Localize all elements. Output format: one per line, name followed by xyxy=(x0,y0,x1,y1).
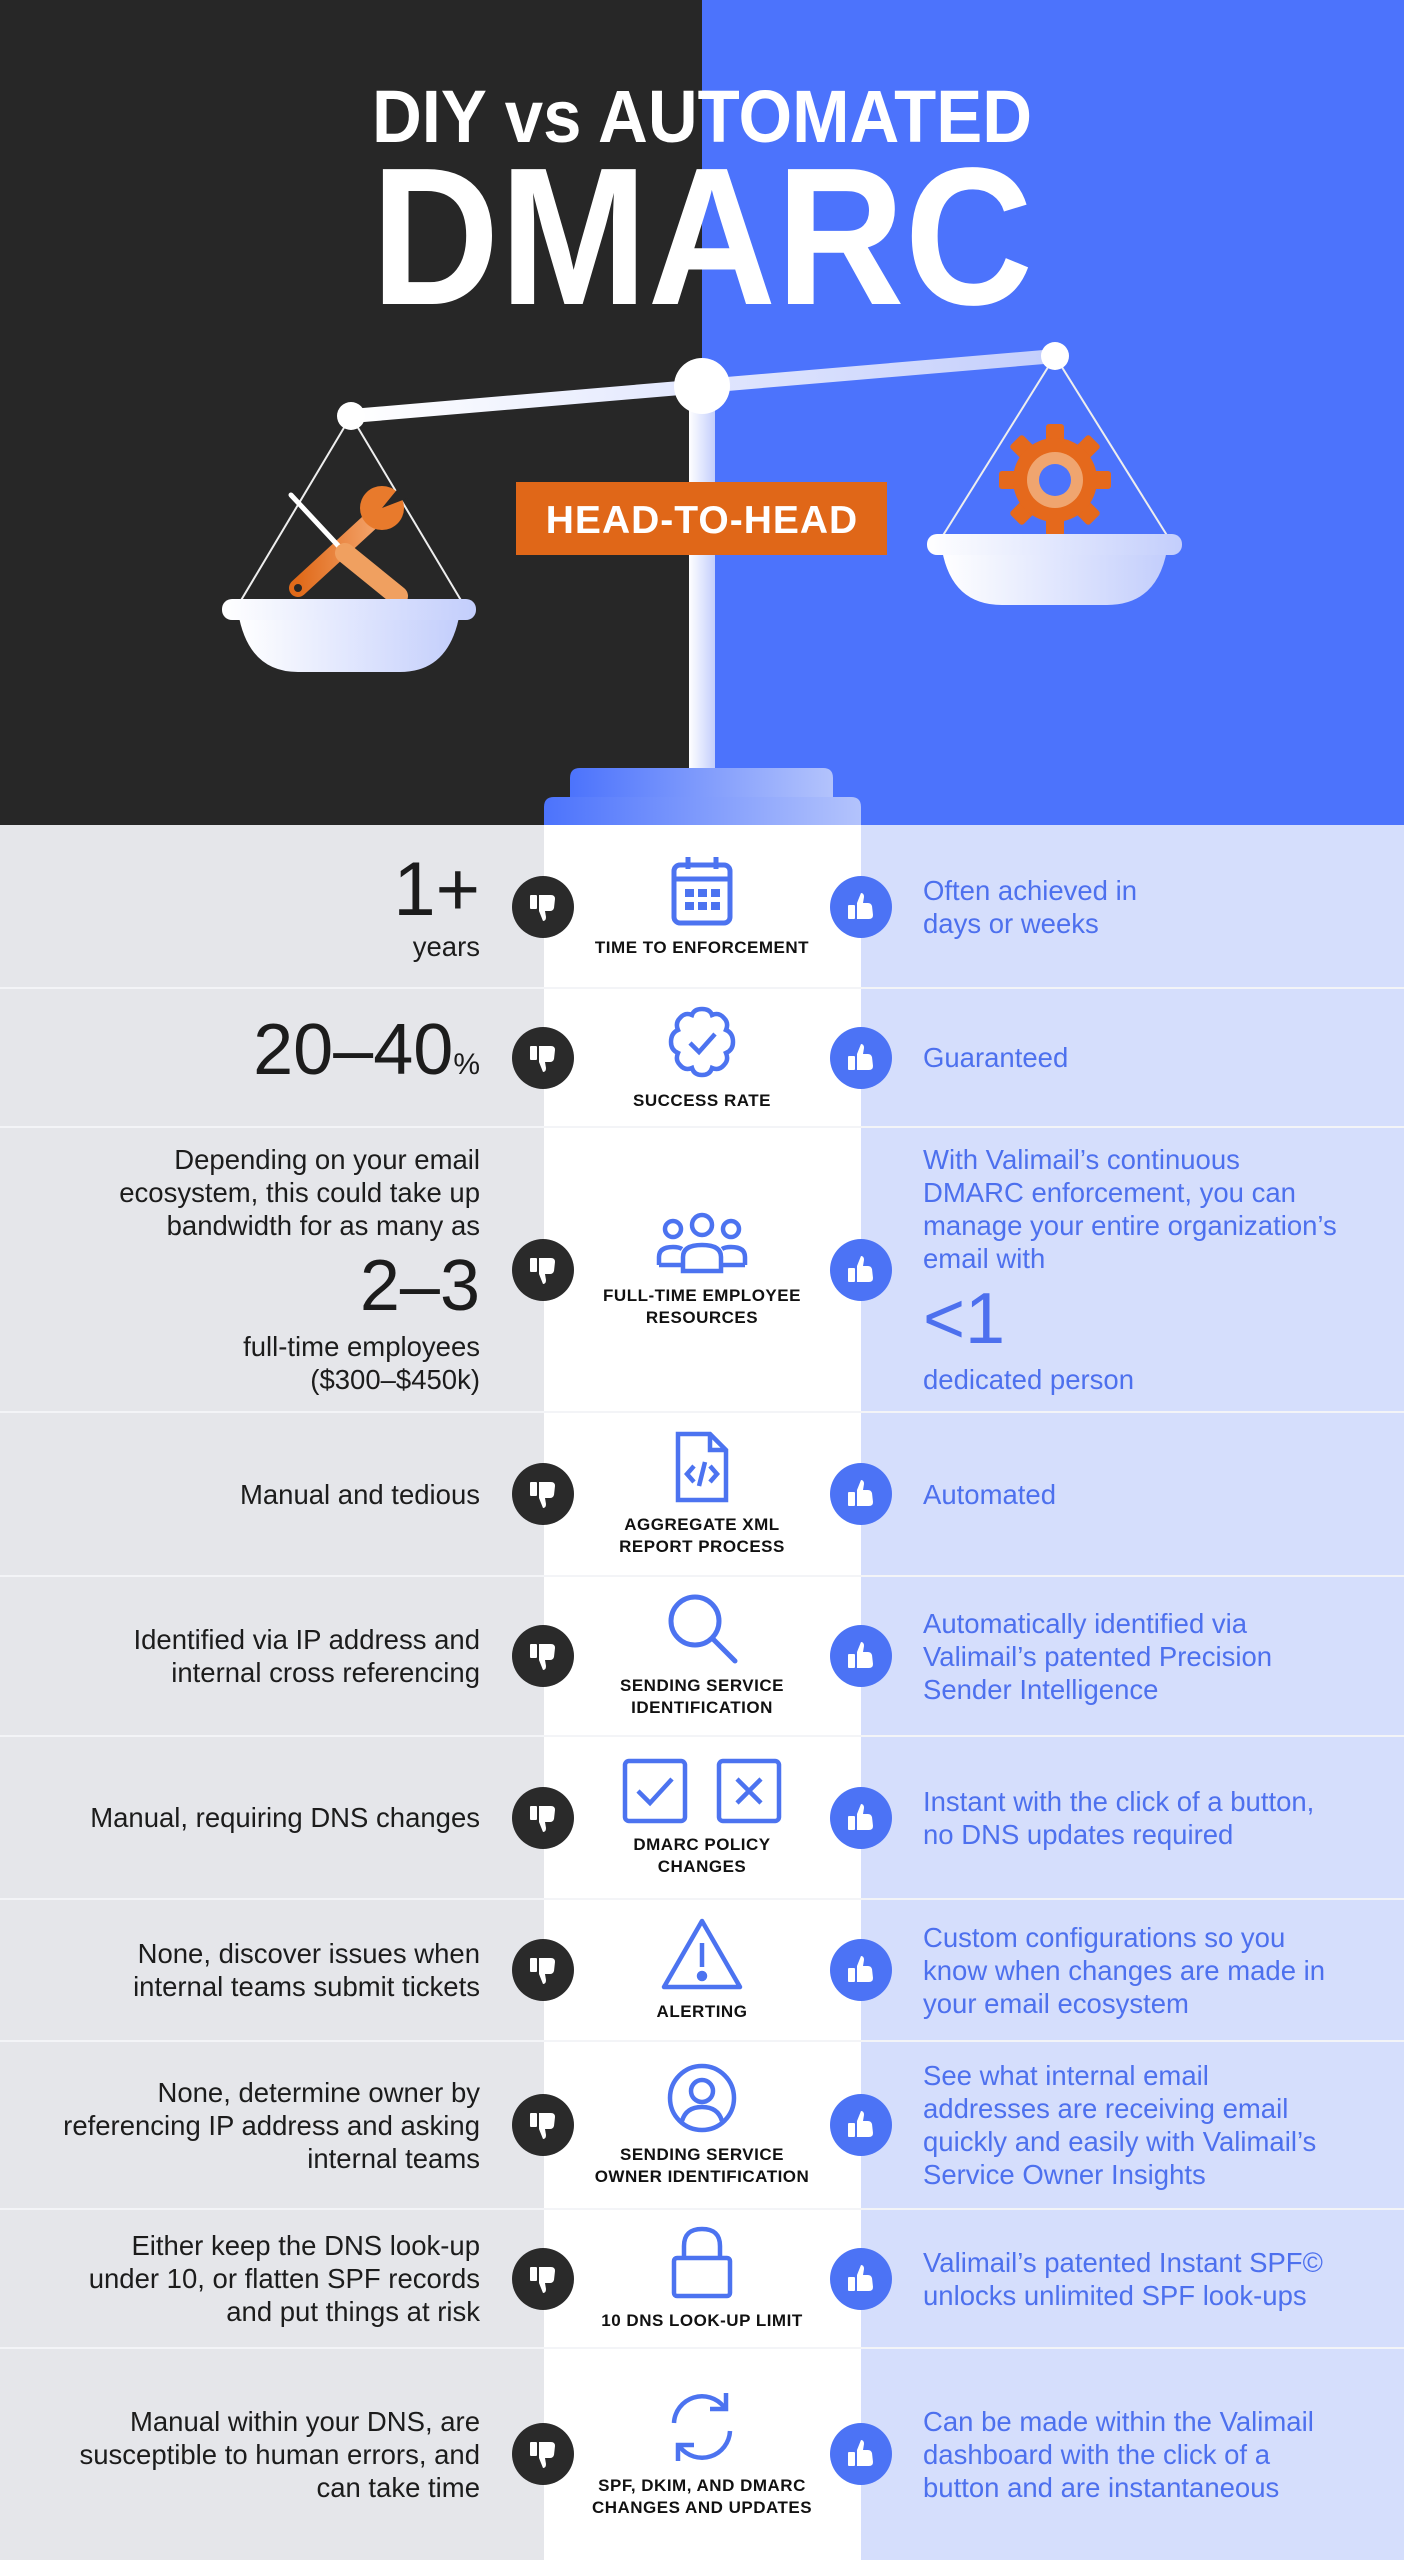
base xyxy=(544,768,861,825)
right text: See what internal email xyxy=(923,2060,1209,2091)
title: DIY vs AUTOMATED xyxy=(372,75,1032,158)
right text: addresses are receiving email xyxy=(923,2093,1288,2124)
thumbs down xyxy=(512,2248,574,2310)
right text xyxy=(923,1922,1325,2019)
center label: CHANGES AND UPDATES xyxy=(592,2498,812,2517)
left text: Manual and tedious xyxy=(240,1478,480,1510)
center label: RESOURCES xyxy=(646,1308,758,1326)
left text: internal cross referencing xyxy=(171,1657,480,1688)
left text: None, discover issues when xyxy=(138,1938,480,1969)
center label xyxy=(633,1006,771,1110)
right text xyxy=(923,1144,1337,1395)
right text xyxy=(923,2348,1393,2560)
center label: AGGREGATE XML xyxy=(624,1515,780,1534)
left text: Either keep the DNS look-up xyxy=(131,2230,480,2261)
thumbs down xyxy=(512,876,574,938)
left text: Identified via IP address and xyxy=(133,1624,480,1655)
right text: unlocks unlimited SPF look-ups xyxy=(923,2280,1307,2310)
thumbs up xyxy=(830,1939,892,2001)
center label xyxy=(595,857,809,956)
right text xyxy=(923,2209,1393,2348)
right text: <1 xyxy=(923,1279,1005,1359)
post xyxy=(689,385,715,775)
right text: With Valimail’s continuous xyxy=(923,1144,1240,1175)
right text xyxy=(923,1786,1314,1850)
icon: tools xyxy=(291,486,408,596)
left text: Manual, requiring DNS changes xyxy=(90,1802,480,1833)
left text: ($300–$450k) xyxy=(310,1364,480,1395)
thumbs down xyxy=(512,2423,574,2485)
left text xyxy=(133,1938,480,2002)
thumbs down xyxy=(512,2094,574,2156)
center label: 10 DNS LOOK-UP LIMIT xyxy=(601,2310,803,2330)
center label xyxy=(622,1758,782,1876)
center label xyxy=(601,2226,803,2330)
thumbs down xyxy=(512,1026,574,1088)
right text: quickly and easily with Valimail’s xyxy=(923,2126,1316,2157)
right text: Custom configurations so you xyxy=(923,1922,1285,1952)
row 3: full-time employee resources xyxy=(119,1144,1337,1395)
row 9: dns look-up limit xyxy=(89,2226,1323,2330)
thumbs up xyxy=(830,2248,892,2310)
center label: OWNER IDENTIFICATION xyxy=(595,2167,809,2186)
thumbs up xyxy=(830,1463,892,1525)
right text: email with xyxy=(923,1243,1045,1274)
right text xyxy=(923,874,1137,939)
left text: can take time xyxy=(316,2472,480,2502)
left text: full-time employees xyxy=(243,1331,480,1362)
right text: button and are instantaneous xyxy=(923,2472,1279,2502)
thumbs up xyxy=(830,2423,892,2485)
right text: Guaranteed xyxy=(923,1042,1068,1073)
right text: Valimail’s patented Instant SPF© xyxy=(923,2246,1323,2278)
center label: REPORT PROCESS xyxy=(619,1537,785,1556)
right text xyxy=(923,1608,1272,1705)
center label xyxy=(619,1432,785,1556)
scale illustration xyxy=(222,342,1182,825)
head-to-head badge xyxy=(516,482,887,555)
center label: IDENTIFICATION xyxy=(631,1698,773,1717)
left text: internal teams submit tickets xyxy=(133,1971,480,2002)
right text: know when changes are made in xyxy=(923,1954,1325,1986)
left text: ecosystem, this could take up xyxy=(119,1177,480,1208)
row 2: success rate xyxy=(253,1006,1068,1110)
center label: SPF, DKIM, AND DMARC xyxy=(598,2476,806,2495)
right pan xyxy=(927,534,1182,605)
left text: referencing IP address and asking xyxy=(63,2110,480,2140)
thumbs down xyxy=(512,1625,574,1687)
left text xyxy=(133,1624,480,1688)
right text: manage your entire organization’s xyxy=(923,1210,1337,1241)
thumbs up xyxy=(830,1786,892,1848)
column backgrounds xyxy=(544,825,1404,2560)
right text: Valimail’s patented Precision xyxy=(923,1640,1272,1672)
right text: DMARC enforcement, you can xyxy=(923,1177,1296,1208)
right text xyxy=(923,2060,1316,2190)
center label: DMARC POLICY xyxy=(633,1834,771,1854)
thumbs up xyxy=(830,876,892,938)
right text: Sender Intelligence xyxy=(923,1674,1158,1704)
right text: days or weeks xyxy=(923,908,1099,938)
right text: Can be made within the Valimail xyxy=(923,2406,1314,2436)
right text: Often achieved in xyxy=(923,874,1137,906)
left text: years xyxy=(413,931,480,962)
thumbs down xyxy=(512,1939,574,2001)
row 4: aggregate xml xyxy=(240,1432,1056,1556)
center label xyxy=(552,2348,852,2560)
left text: bandwidth for as many as xyxy=(167,1210,480,1241)
center label xyxy=(603,1212,801,1326)
row 8: sending service owner identification xyxy=(63,2060,1316,2190)
center label: CHANGES xyxy=(658,1856,746,1876)
left text: 20–40% xyxy=(253,1010,480,1090)
right text: Automated xyxy=(923,1478,1056,1510)
left text: susceptible to human errors, and xyxy=(80,2438,480,2470)
right text: your email ecosystem xyxy=(923,1988,1189,2018)
center label: SUCCESS RATE xyxy=(633,1090,771,1110)
center label xyxy=(657,1918,747,2021)
left text: None, determine owner by xyxy=(157,2076,480,2108)
left text: and put things at risk xyxy=(226,2296,480,2327)
thumbs up xyxy=(830,1238,892,1300)
strings xyxy=(240,356,1168,602)
left text: 1+ xyxy=(393,847,480,932)
right text: Instant with the click of a button, xyxy=(923,1786,1314,1816)
left text xyxy=(119,1144,480,1395)
thumbs down xyxy=(512,1463,574,1525)
center label: FULL-TIME EMPLOYEE xyxy=(603,1286,801,1304)
left text: 2–3 xyxy=(360,1246,480,1326)
right text: dashboard with the click of a xyxy=(923,2438,1270,2470)
left text: internal teams xyxy=(307,2142,480,2174)
left text xyxy=(63,2076,480,2174)
center label: SENDING SERVICE xyxy=(620,2145,784,2164)
beam xyxy=(351,349,1056,423)
thumbs down xyxy=(512,1238,574,1300)
thumbs up xyxy=(830,1625,892,1687)
right text: no DNS updates required xyxy=(923,1818,1233,1850)
icon: gear xyxy=(999,424,1111,536)
left text xyxy=(89,2230,480,2327)
right text: Automatically identified via xyxy=(923,1608,1247,1638)
center label: ALERTING xyxy=(657,2002,747,2021)
center label: SENDING SERVICE xyxy=(620,1676,784,1695)
left text: under 10, or flatten SPF records xyxy=(89,2263,480,2294)
header background xyxy=(0,0,1404,825)
left text xyxy=(10,2348,480,2560)
row 5: sending service identification xyxy=(133,1594,1272,1717)
thumbs up xyxy=(830,2094,892,2156)
center label: TIME TO ENFORCEMENT xyxy=(595,938,809,956)
head-to-head badge: HEAD-TO-HEAD xyxy=(546,499,858,542)
row 1: time to enforcement xyxy=(393,847,1137,962)
row 6: dmarc policy changes xyxy=(90,1758,1314,1876)
row 10: spf dkim dmarc updates xyxy=(0,2348,1404,2560)
left text: Depending on your email xyxy=(174,1144,480,1175)
thumbs down xyxy=(512,1786,574,1848)
thumbs up xyxy=(830,1026,892,1088)
right text: dedicated person xyxy=(923,1364,1134,1395)
right text: Service Owner Insights xyxy=(923,2159,1206,2190)
left pan xyxy=(222,599,476,672)
center label xyxy=(595,2064,809,2186)
left text: Manual within your DNS, are xyxy=(130,2406,480,2436)
row dividers xyxy=(0,987,1404,2349)
center label xyxy=(620,1594,784,1717)
row 7: alerting xyxy=(133,1918,1325,2021)
